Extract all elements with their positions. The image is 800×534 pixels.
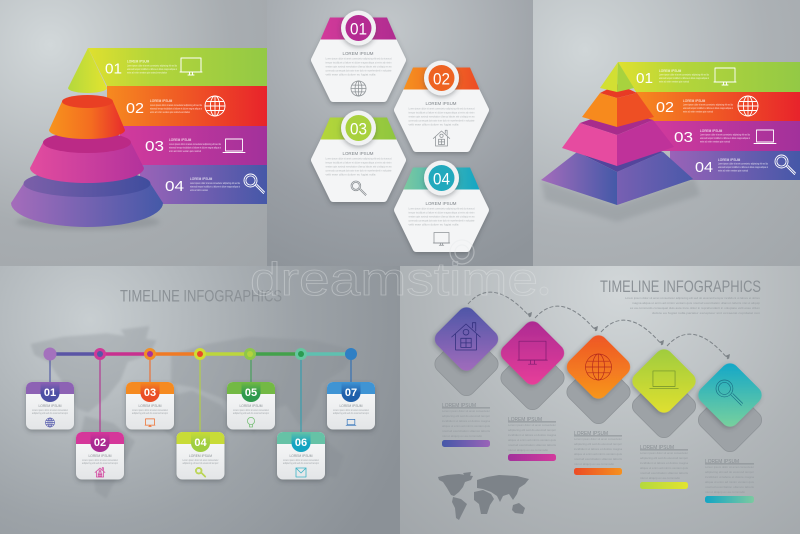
timeline card 07: Lorem ipsum dolor sit amet consectetur: [333, 408, 369, 412]
title: TIMELINE INFOGRAPHICS: [120, 288, 282, 306]
hexagon card 03: veniam quis nostrud exercitation ullamco laboris nisi ut aliquip ex ea: [326, 164, 392, 168]
timeline card 04: 04: [194, 437, 207, 449]
band 01 green: enim ad minim veniam quis nostrud: [659, 80, 689, 84]
hexagon card 04: Lorem ipsum dolor sit amet consectetur adipiscing elit sed do eiusmod: [408, 206, 475, 210]
step 3: nostrud exercitation ullamco laboris: [574, 457, 623, 461]
icon: monitor: [518, 341, 547, 364]
timeline card 01: Lorem ipsum dolor sit amet consectetur: [32, 408, 68, 412]
icon: magnifier: [716, 380, 743, 405]
timeline card 03: Lorem ipsum dolor sit amet consectetur: [132, 408, 168, 412]
band 01 green: [88, 48, 267, 86]
dashed arrows: [468, 292, 730, 359]
icon: magnifier: [196, 468, 206, 477]
band 01 green: LOREM IPSUM: [127, 60, 150, 64]
hexagon card 02: 02: [433, 70, 450, 88]
step 1: incididunt ut labore et dolore magna: [442, 419, 491, 423]
step 3: Lorem ipsum dolor sit amet consectetur: [574, 437, 622, 441]
band 03 magenta: LOREM IPSUM: [169, 138, 192, 142]
panel: cone pyramid: [0, 0, 267, 266]
band 04 purple: enim ad minim veniam quis nostrud: [718, 168, 748, 172]
hexagon card 02: [398, 60, 485, 148]
band 03 magenta: eiusmod tempor incididunt ut labore et dolore magna aliqua ut: [169, 146, 221, 150]
band 03 magenta: enim ad minim veniam quis nostrud: [169, 149, 201, 153]
pyramid layer purple: [541, 136, 693, 205]
band 03 magenta: LOREM IPSUM: [700, 129, 723, 133]
icon: house: [452, 323, 480, 350]
step 4: adipiscing elit sed do eiusmod tempor: [640, 456, 688, 460]
step 4: Lorem ipsum dolor sit amet consectetur: [640, 451, 688, 455]
cone tip green: [68, 48, 107, 93]
band 01 green: Lorem ipsum dolor sit amet consectetur adipiscing elit sed do: [127, 64, 177, 68]
step 3: aliqua ut enim ad minim veniam quis: [574, 452, 623, 456]
icon: laptop: [754, 130, 776, 144]
intro text: dolore eu fugiat nulla pariatur excepteur sint occaecat cupidatat non: [652, 311, 761, 315]
band 04 purple: Lorem ipsum dolor sit amet consectetur adipiscing elit sed do: [190, 181, 240, 185]
band 02 red: enim ad minim veniam quis nostrud exercitation: [150, 110, 190, 114]
cone layer orange: [49, 95, 125, 139]
panel: diamond timeline: [400, 266, 800, 534]
step 4: nisi ut aliquip ex ea commodo: [640, 476, 681, 480]
step 1: aliqua ut enim ad minim veniam quis: [442, 424, 491, 428]
hexagon card 04: [398, 160, 485, 248]
icon: monitor: [433, 232, 450, 245]
step 5: nostrud exercitation ullamco laboris: [705, 485, 755, 489]
timeline card 06: [277, 432, 325, 480]
band 03 magenta: 03: [145, 138, 164, 155]
hexagon card 04: commodo consequat duis aute irure dolor in reprehenderit in voluptate: [408, 218, 475, 222]
timeline card 04: LOREM IPSUM: [189, 454, 212, 458]
band 03 magenta: 03: [674, 129, 693, 146]
icon: laptop: [223, 139, 245, 152]
hexagon card 02: velit esse cillum dolore eu fugiat nulla: [408, 122, 459, 126]
step 1: LOREM IPSUM: [442, 403, 476, 409]
hexagon card 01: 01: [350, 20, 367, 38]
timeline card 02: adipiscing elit sed do eiusmod tempor: [82, 461, 118, 465]
band 04 purple: eiusmod tempor incididunt ut labore et dolore magna aliqua ut: [718, 165, 768, 169]
band 01 green: eiusmod tempor incididunt ut labore et dolore magna aliqua ut: [127, 67, 177, 71]
timeline card 07: adipiscing elit sed do eiusmod tempor: [333, 411, 369, 415]
timeline card 07: 07: [345, 387, 357, 399]
icon: globe: [46, 418, 54, 427]
step 2: LOREM IPSUM: [508, 417, 542, 423]
band 02 red: Lorem ipsum dolor sit amet consectetur adipiscing elit sed do: [150, 103, 202, 107]
band 03 magenta: [650, 121, 800, 151]
step 3: [563, 332, 634, 475]
hexagon card 01: velit esse cillum dolore eu fugiat nulla: [326, 72, 376, 76]
band 02 red: enim ad minim veniam quis nostrud: [683, 110, 713, 114]
band 04 purple: [670, 151, 800, 180]
hexagon card 02: LOREM IPSUM: [426, 101, 457, 106]
pyramid layer orange: [582, 84, 654, 127]
timeline card 06: LOREM IPSUM: [289, 454, 313, 458]
step 2: nostrud exercitation ullamco laboris: [508, 443, 557, 447]
timeline card 01: adipiscing elit sed do eiusmod tempor: [32, 411, 68, 415]
step 2: nisi ut aliquip ex ea commodo: [508, 448, 549, 452]
step 1: Lorem ipsum dolor sit amet consectetur: [442, 409, 490, 413]
icon: globe: [205, 96, 225, 116]
cone layer magenta: [30, 132, 144, 183]
icon: monitor: [145, 419, 155, 427]
timeline card 06: adipiscing elit sed do eiusmod tempor: [283, 461, 319, 465]
icon: magnifier: [351, 181, 366, 196]
band 02 red: [636, 92, 800, 121]
band 02 red: 02: [656, 99, 674, 116]
step 3: LOREM IPSUM: [574, 431, 608, 437]
hexagon card 03: commodo consequat duis aute irure dolor in reprehenderit in voluptate: [326, 168, 392, 172]
timeline card 05: LOREM IPSUM: [239, 404, 263, 408]
timeline card 03: 03: [144, 387, 156, 399]
step 2: Lorem ipsum dolor sit amet consectetur: [508, 423, 556, 427]
timeline card 01: LOREM IPSUM: [38, 404, 62, 408]
timeline card 02: 02: [94, 437, 106, 449]
hexagon card 01: tempor incididunt ut labore et dolore magna aliqua ut enim ad minim: [326, 60, 392, 64]
band 01 green: LOREM IPSUM: [659, 69, 682, 73]
hexagon card 02: Lorem ipsum dolor sit amet consectetur adipiscing elit sed do eiusmod: [408, 106, 475, 110]
band 03 magenta: enim ad minim veniam quis nostrud: [700, 140, 730, 144]
icon: magnifier: [775, 155, 796, 174]
icon: magnifier: [244, 174, 264, 194]
step 3: nisi ut aliquip ex ea commodo: [574, 462, 615, 466]
band 01 green: eiusmod tempor incididunt ut labore et dolore magna aliqua ut: [659, 76, 709, 80]
panel: world map timeline: [0, 266, 400, 534]
panel: hexagons: [267, 0, 533, 266]
pyramid tip green: [600, 62, 634, 92]
step 1: nisi ut aliquip ex ea commodo: [442, 434, 483, 438]
connectors: [50, 359, 351, 432]
timeline card 07: LOREM IPSUM: [339, 404, 363, 408]
band 03 magenta: Lorem ipsum dolor sit amet consectetur adipiscing elit sed do: [700, 132, 750, 136]
band 03 magenta: [120, 126, 267, 165]
icon: monitor: [714, 68, 736, 85]
world map background: [31, 326, 358, 499]
pyramid layer magenta: [562, 110, 674, 166]
timeline card 05: 05: [245, 387, 257, 399]
hexagon card 04: velit esse cillum dolore eu fugiat nulla: [408, 222, 459, 226]
hexagon card 03: velit esse cillum dolore eu fugiat nulla: [326, 172, 376, 176]
icon: house: [95, 468, 105, 477]
step 1: adipiscing elit sed do eiusmod tempor: [442, 414, 490, 418]
hexagon card 01: [315, 10, 402, 98]
cone pyramid: [11, 48, 163, 230]
step 4: LOREM IPSUM: [640, 445, 674, 451]
band 01 green: 01: [636, 70, 653, 87]
step 4: [629, 346, 699, 489]
band 04 purple: eiusmod tempor incididunt ut labore et dolore magna aliqua ut: [190, 184, 240, 188]
band 02 red: eiusmod tempor incididunt ut labore et dolore magna aliqua ut: [150, 106, 202, 110]
timeline card 06: Lorem ipsum dolor sit amet consectetur: [283, 458, 319, 462]
icon: globe: [586, 354, 612, 380]
timeline card 05: adipiscing elit sed do eiusmod tempor: [233, 411, 269, 415]
hexagon card 02: veniam quis nostrud exercitation ullamco laboris nisi ut aliquip ex ea: [408, 114, 475, 118]
timeline card 02: Lorem ipsum dolor sit amet consectetur: [82, 458, 118, 462]
timeline card 01: 01: [44, 387, 56, 399]
hexagon card 04: tempor incididunt ut labore et dolore magna aliqua ut enim ad minim: [408, 210, 475, 214]
icon: laptop: [650, 371, 678, 388]
band 02 red: 02: [126, 100, 144, 117]
icon: light bulb: [247, 417, 255, 427]
icon: monitor: [180, 58, 202, 75]
timeline card 04: adipiscing elit sed do eiusmod tempor: [182, 461, 219, 465]
step 4: nostrud exercitation ullamco laboris: [640, 471, 689, 475]
band 04 purple: LOREM IPSUM: [190, 177, 213, 181]
band 02 red: Lorem ipsum dolor sit amet consectetur adipiscing elit sed do: [683, 102, 733, 106]
timeline card 03: LOREM IPSUM: [138, 404, 162, 408]
step 2: aliqua ut enim ad minim veniam quis: [508, 438, 557, 442]
step 3: incididunt ut labore et dolore magna: [574, 447, 623, 451]
hexagon card 02: tempor incididunt ut labore et dolore magna aliqua ut enim ad minim: [408, 110, 475, 114]
intro text: [625, 296, 761, 315]
timeline card 04: [176, 432, 224, 480]
timeline card 03: [126, 382, 174, 430]
hexagon card 01: commodo consequat duis aute irure dolor in reprehenderit in voluptate: [326, 68, 392, 72]
timeline card 02: [76, 432, 124, 480]
band 01 green: Lorem ipsum dolor sit amet consectetur adipiscing elit sed do: [659, 72, 709, 76]
stepped pyramid: [541, 62, 700, 222]
band 03 magenta: eiusmod tempor incididunt ut labore et dolore magna aliqua ut: [700, 136, 750, 140]
step 1: [431, 304, 502, 447]
icon: globe: [738, 96, 758, 116]
timeline card 06: 06: [295, 437, 307, 449]
band 02 red: LOREM IPSUM: [150, 99, 173, 103]
band 04 purple: [140, 165, 267, 204]
step 4: aliqua ut enim ad minim veniam quis: [640, 466, 689, 470]
band 02 red: eiusmod tempor incididunt ut labore et dolore magna aliqua ut: [683, 106, 733, 110]
hexagon card 03: 03: [350, 120, 367, 138]
timeline card 05: Lorem ipsum dolor sit amet consectetur: [233, 408, 269, 412]
band 04 purple: 04: [695, 159, 713, 176]
step 5: nisi ut aliquip ex ea commodo: [705, 490, 746, 494]
watermark: [250, 240, 548, 305]
step 5: aliqua ut enim ad minim veniam quis: [705, 480, 755, 484]
hexagon card 03: [315, 110, 402, 198]
step 2: [497, 318, 568, 461]
band 04 purple: enim ad minim veniam: [190, 188, 208, 192]
step 5: [695, 360, 765, 503]
band 03 magenta: Lorem ipsum dolor sit amet consectetur adipiscing elit sed do: [169, 142, 221, 146]
intro text: ex ea commodo consequat duis aute irure dolor in reprehenderit in voluptate velit esse cillum: [630, 306, 761, 310]
icon: envelope: [296, 468, 306, 477]
timeline nodes: [44, 348, 357, 360]
band 02 red: [107, 86, 267, 126]
hexagon card 03: Lorem ipsum dolor sit amet consectetur adipiscing elit sed do eiusmod: [326, 156, 392, 160]
cone layer purple: [11, 170, 163, 227]
hexagon card 03: tempor incididunt ut labore et dolore magna aliqua ut enim ad minim: [326, 160, 392, 164]
intro text: Lorem ipsum dolor sit amet consectetur adipiscing elit sed do eiusmod tempor incididunt ut labore et dolore: [625, 296, 761, 300]
band 01 green: 01: [105, 60, 122, 78]
hexagon card 04: LOREM IPSUM: [426, 201, 457, 206]
step 5: incididunt ut labore et dolore magna: [705, 475, 755, 479]
band 04 purple: 04: [165, 178, 184, 195]
band 01 green: enim ad minim veniam quis nostrud exercitation: [127, 70, 167, 74]
icon: laptop: [346, 419, 356, 425]
step 4: incididunt ut labore et dolore magna: [640, 461, 689, 465]
hexagon card 01: veniam quis nostrud exercitation ullamco laboris nisi ut aliquip ex ea: [326, 64, 392, 68]
intro text: magna aliqua ut enim ad minim veniam quis nostrud exercitation ullamco laboris nisi ut aliquip: [632, 301, 761, 305]
hexagon card 04: veniam quis nostrud exercitation ullamco laboris nisi ut aliquip ex ea: [408, 214, 475, 218]
timeline line: [50, 352, 351, 356]
icon: globe: [351, 81, 366, 96]
hexagon card 02: commodo consequat duis aute irure dolor in reprehenderit in voluptate: [408, 118, 475, 122]
timeline card 03: adipiscing elit sed do eiusmod tempor: [132, 411, 168, 415]
timeline card 05: [227, 382, 275, 430]
band 02 red: LOREM IPSUM: [683, 99, 706, 103]
band 01 green: [618, 62, 800, 92]
timeline card 07: [327, 382, 375, 430]
step 2: incididunt ut labore et dolore magna: [508, 433, 557, 437]
step 1: nostrud exercitation ullamco laboris: [442, 429, 491, 433]
step 5: Lorem ipsum dolor sit amet consectetur: [705, 465, 754, 469]
timeline card 04: Lorem ipsum dolor sit amet consectetur: [182, 458, 219, 462]
step 5: adipiscing elit sed do eiusmod tempor: [705, 470, 754, 474]
hexagon card 01: LOREM IPSUM: [342, 51, 374, 56]
timeline card 01: [26, 382, 74, 430]
hexagon card 03: LOREM IPSUM: [342, 151, 374, 156]
step 5: LOREM IPSUM: [705, 459, 739, 465]
timeline card 02: LOREM IPSUM: [88, 454, 112, 458]
band 04 purple: LOREM IPSUM: [718, 158, 741, 162]
step 2: adipiscing elit sed do eiusmod tempor: [508, 428, 556, 432]
panel: 3D pyramid: [533, 0, 800, 266]
hexagon card 01: Lorem ipsum dolor sit amet consectetur adipiscing elit sed do eiusmod: [326, 56, 392, 60]
small world map: [438, 472, 529, 520]
icon: house: [433, 130, 450, 146]
hexagon card 04: 04: [433, 170, 450, 188]
step 3: adipiscing elit sed do eiusmod tempor: [574, 442, 622, 446]
band 04 purple: Lorem ipsum dolor sit amet consectetur adipiscing elit sed do: [718, 162, 768, 166]
watermark: dreamstime: [250, 253, 538, 305]
